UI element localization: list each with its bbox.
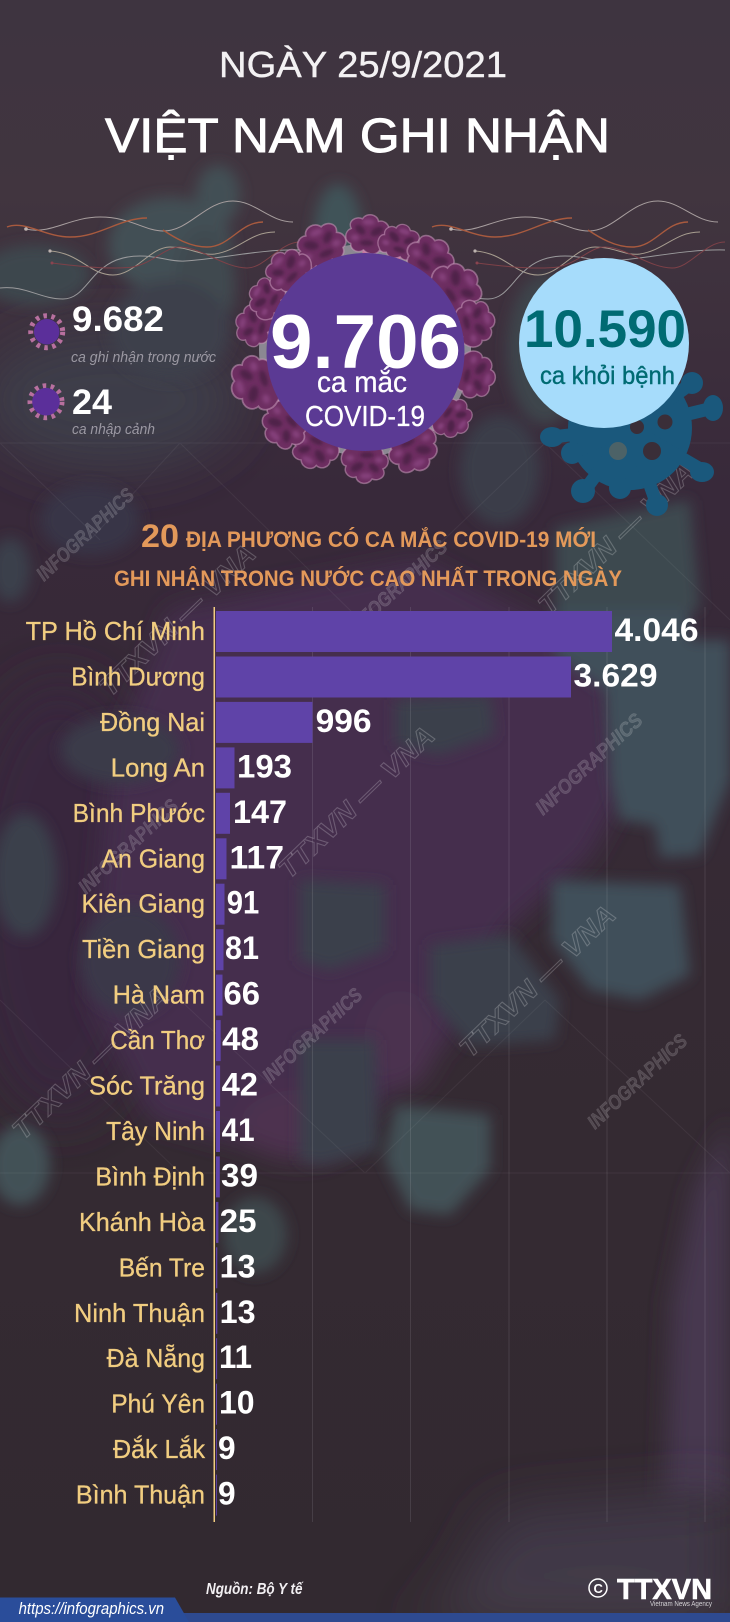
- row: Long An: Long An: [111, 752, 205, 782]
- stat: domestic cases: [71, 300, 216, 366]
- row: Cần Thơ: 48: [222, 1021, 259, 1057]
- panel: total cases circle: 9.706: [270, 300, 461, 385]
- row: Bình Định: Bình Định: [95, 1161, 205, 1191]
- row: Bình Dương: Bình Dương: [71, 662, 205, 692]
- logo: TTXVN: Vietnam News Agency: [650, 1601, 712, 1608]
- footer bar: [0, 1598, 730, 1622]
- panel: recovered circle: [519, 258, 689, 428]
- watermarks: TTXVN — VNA: [272, 720, 441, 884]
- row: Bình Thuận: [76, 1475, 236, 1516]
- row: Bình Định: [95, 1156, 258, 1197]
- watermarks: [6, 456, 701, 1145]
- row: Long An: 193: [237, 748, 292, 784]
- icon: blue virus: [540, 366, 723, 516]
- panel: recovered circle: 10.590: [524, 300, 686, 359]
- row: Tây Ninh: [106, 1111, 255, 1152]
- row: Đồng Nai: 996: [316, 703, 372, 739]
- row: Đắk Lắk: Đắk Lắk: [113, 1434, 206, 1464]
- row: Sóc Trăng: [89, 1066, 258, 1106]
- row: Bình Dương: [71, 656, 657, 698]
- heading: chart title: ĐỊA PHƯƠNG CÓ CA MẮC COVID-19 MỚI: [186, 527, 596, 552]
- row: Bình Dương: 3.629: [574, 658, 658, 694]
- row: TP Hồ Chí Minh: TP Hồ Chí Minh: [26, 616, 205, 646]
- panel: recovered circle: ca khỏi bệnh: [540, 362, 675, 390]
- row: Đà Nẵng: Đà Nẵng: [107, 1343, 205, 1373]
- icon: domestic case virus: [31, 316, 63, 348]
- heading: chart title: GHI NHẬN TRONG NƯỚC CAO NHẤT TRONG NGÀY: [114, 566, 622, 591]
- row: Đồng Nai: [100, 702, 372, 743]
- row: Bình Thuận: Bình Thuận: [76, 1480, 205, 1510]
- panel: total cases circle: [266, 253, 464, 451]
- watermarks: TTXVN — VNA: [532, 456, 701, 620]
- watermarks: TTXVN — VNA: [6, 981, 175, 1145]
- logo: TTXVN: TTXVN: [617, 1574, 712, 1606]
- stat: domestic cases: ca ghi nhận trong nước: [71, 349, 216, 366]
- watermarks: TTXVN — VNA: [93, 538, 262, 702]
- row: Sóc Trăng: Sóc Trăng: [89, 1070, 205, 1100]
- panel: total cases circle: ca mắc: [317, 366, 407, 399]
- title: date: NGÀY 25/9/2021: [219, 44, 507, 85]
- row: Bình Thuận: 9: [218, 1476, 236, 1512]
- row: Kiên Giang: Kiên Giang: [82, 889, 205, 919]
- row: Khánh Hòa: Khánh Hòa: [79, 1207, 206, 1237]
- faint pattern and chart grid lines: [0, 443, 730, 1522]
- row: Tiền Giang: [82, 929, 259, 970]
- row: Ninh Thuận: Ninh Thuận: [74, 1298, 205, 1328]
- watermarks: INFOGRAPHICS: [531, 709, 648, 820]
- row: TP Hồ Chí Minh: 4.046: [614, 612, 698, 648]
- decorative wave lines: [0, 201, 725, 299]
- row: Đắk Lắk: [113, 1429, 236, 1470]
- title: main heading: VIỆT NAM GHI NHẬN: [105, 110, 610, 163]
- stat: imported cases: ca nhập cảnh: [72, 421, 155, 438]
- heading: chart title: [114, 518, 622, 591]
- footer bar: https://infographics.vn: [19, 1599, 164, 1618]
- watermarks: INFOGRAPHICS: [32, 484, 139, 586]
- icon: main coronavirus: [224, 214, 500, 483]
- row: Phú Yên: [111, 1384, 255, 1425]
- row: Long An: [111, 747, 292, 788]
- row: Bình Phước: Bình Phước: [73, 798, 205, 828]
- row: Tiền Giang: Tiền Giang: [82, 934, 205, 964]
- row: Đà Nẵng: 11: [219, 1339, 252, 1375]
- row: Ninh Thuận: [74, 1293, 256, 1334]
- row: Đắk Lắk: 9: [218, 1430, 236, 1466]
- row: Tây Ninh: 41: [222, 1112, 255, 1148]
- bar chart: [26, 607, 699, 1522]
- row: Đà Nẵng: [107, 1338, 252, 1379]
- row: Cần Thơ: Cần Thơ: [110, 1025, 205, 1055]
- stat: imported cases: [72, 383, 155, 438]
- stat: domestic cases: 9.682: [72, 300, 164, 339]
- row: Hà Nam: [113, 975, 260, 1016]
- watermarks: TTXVN — VNA: [453, 899, 622, 1063]
- source note: Nguồn: Bộ Y tế: [206, 1581, 304, 1598]
- stat: imported cases: 24: [72, 383, 113, 422]
- row: An Giang: 117: [230, 839, 284, 875]
- row: Hà Nam: Hà Nam: [113, 980, 205, 1010]
- row: TP Hồ Chí Minh: [26, 611, 699, 652]
- row: Bình Phước: 147: [233, 794, 287, 830]
- row: Kiên Giang: 91: [227, 885, 259, 921]
- row: Cần Thơ: [110, 1020, 259, 1061]
- row: Phú Yên: Phú Yên: [111, 1389, 205, 1419]
- row: Đồng Nai: Đồng Nai: [100, 707, 205, 737]
- row: An Giang: An Giang: [102, 843, 205, 873]
- row: Hà Nam: 66: [224, 976, 260, 1012]
- row: Bình Phước: [73, 793, 287, 834]
- watermarks: INFOGRAPHICS: [583, 1030, 692, 1134]
- row: Bến Tre: Bến Tre: [119, 1252, 205, 1282]
- watermarks: INFOGRAPHICS: [343, 536, 452, 640]
- heading: chart title: 20: [141, 518, 179, 554]
- row: Bình Định: 39: [221, 1157, 258, 1193]
- row: Phú Yên: 10: [219, 1385, 255, 1421]
- row: Kiên Giang: [82, 884, 259, 925]
- watermarks: INFOGRAPHICS: [258, 984, 367, 1088]
- panel: total cases circle: COVID-19: [305, 401, 425, 433]
- row: Ninh Thuận: 13: [220, 1294, 256, 1330]
- background: teal virus lobes: [0, 165, 730, 1273]
- row: Tiền Giang: 81: [225, 930, 259, 966]
- row: Khánh Hòa: 25: [220, 1203, 256, 1239]
- row: An Giang: [102, 838, 284, 879]
- row: Tây Ninh: Tây Ninh: [106, 1116, 205, 1146]
- watermarks: INFOGRAPHICS: [74, 795, 183, 899]
- icon: imported case virus: [30, 386, 62, 418]
- row: Bến Tre: 13: [220, 1248, 256, 1284]
- row: Sóc Trăng: 42: [222, 1066, 258, 1102]
- row: Bến Tre: [119, 1247, 256, 1288]
- logo: TTXVN: C: [594, 1581, 604, 1596]
- row: Khánh Hòa: [79, 1202, 256, 1243]
